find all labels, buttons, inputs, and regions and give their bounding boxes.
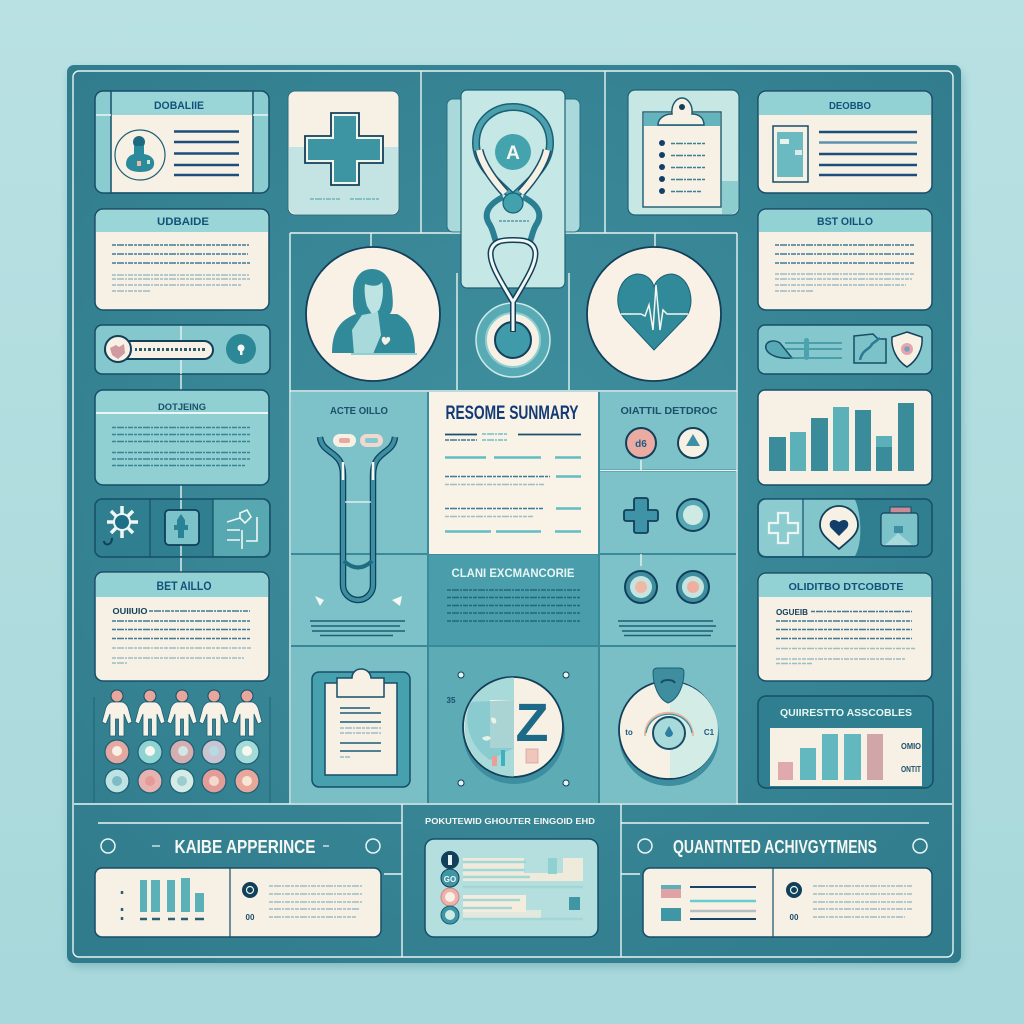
icon: teal square [165, 510, 199, 545]
heading: BET AILLO [156, 581, 212, 593]
lines [690, 887, 756, 919]
icon: clipboard [312, 669, 410, 787]
panel: right skills text card [758, 209, 932, 310]
heading: QUANTNTED ACHIVGYTMENS [673, 837, 877, 857]
icons: rings [101, 839, 380, 853]
icon: key circle [226, 334, 256, 364]
icon: shield [892, 332, 922, 367]
lines [819, 132, 917, 175]
title: RESOME SUNMARY [446, 403, 579, 424]
body text: OGUEIB [776, 608, 808, 617]
card: 00 [246, 913, 255, 922]
icon: stethoscope [476, 107, 550, 332]
body text [112, 245, 250, 263]
panel: bottom centre Z cell [429, 647, 598, 803]
lines [310, 621, 405, 636]
panel: right bar chart card [758, 390, 932, 485]
panel: digital records cells [600, 392, 737, 645]
heading: UDBAIDE [157, 216, 209, 228]
heading: OIATTIL DETDROC [620, 406, 718, 417]
sparkles [315, 596, 402, 606]
icon: dial: to [625, 728, 633, 737]
icon: stethoscope chest piece [476, 302, 550, 377]
icon: Z disc: Z [516, 693, 548, 753]
icon: sketch diagram [227, 510, 257, 549]
text lines [174, 132, 239, 175]
caption [310, 198, 379, 200]
panel: right description card [758, 573, 932, 681]
icon: drop badge [678, 428, 708, 458]
icon: outlined cross [769, 513, 798, 543]
icon: profile avatar [115, 130, 165, 180]
icon: cross [305, 113, 383, 185]
icons: badge rows [105, 740, 259, 793]
icon: stethoscope tube [320, 437, 395, 600]
panel: left key skills card [95, 572, 269, 681]
lines [618, 621, 716, 636]
pills [333, 434, 383, 447]
small label: 35 [447, 696, 456, 705]
dots [458, 672, 569, 786]
people and badges [94, 690, 270, 803]
panel: left icon strip [95, 499, 270, 557]
icon: circle [786, 882, 802, 898]
swatches [661, 885, 681, 921]
icon: pink badge [626, 428, 656, 458]
icon: pink badge: d6 [635, 439, 647, 450]
icon: ring badge [677, 499, 709, 531]
checklist [659, 140, 665, 194]
icons: list markers: GO [444, 875, 456, 884]
icon: dial [619, 668, 718, 779]
panel: bottom left clipboard cell [291, 647, 427, 803]
panel: left column top profile card [95, 91, 269, 193]
panel: right achievements chart card: ONTIT [901, 764, 922, 774]
body text [447, 590, 580, 621]
heading: DOTJEING [158, 402, 206, 413]
card: 00 [790, 913, 799, 922]
heading: DOBALIIE [154, 100, 204, 112]
icon: gear [104, 506, 138, 544]
heading: POKUTEWID GHOUTER EINGOID EHD [425, 816, 595, 826]
panel: right icon card [758, 325, 932, 374]
summary lines [445, 434, 581, 532]
panel: medical cross card [288, 91, 399, 215]
icon: letter badge [495, 134, 531, 170]
labels: OMIO [901, 741, 921, 751]
panel: clinical experience [429, 555, 598, 645]
main panel [67, 65, 962, 966]
panel: left progress card [95, 325, 270, 374]
icon: letter badge: A [506, 143, 520, 164]
icon: document [773, 126, 808, 182]
panel: left text card [95, 209, 269, 310]
panel: right achievements chart card [758, 696, 933, 788]
heading: KAIBE APPERINCE [174, 837, 316, 857]
icons: people row [102, 690, 262, 736]
bar chart [769, 403, 914, 471]
panel: clipboard card [628, 90, 739, 215]
heading: BST OILLO [817, 216, 873, 228]
heading: CLANI EXCMANCORIE [452, 568, 575, 580]
icons: list markers [441, 851, 459, 924]
heading: OLIDITBO DTCOBDTE [788, 581, 904, 593]
panel: bottom achievements [638, 837, 932, 937]
icon: clip [658, 98, 704, 125]
panel: core skills cell [291, 392, 427, 645]
panel: right icon strip [758, 499, 932, 557]
icon: folder [881, 507, 918, 546]
panel: right document card [758, 91, 932, 193]
panel: bottom right dial cell [600, 647, 736, 803]
panel: stethoscope card [447, 90, 580, 332]
panel: resume summary [429, 392, 598, 554]
icon: circle [242, 882, 258, 898]
icon: rounded cross [624, 498, 658, 533]
icon: heart pin [820, 506, 858, 549]
card [643, 868, 932, 937]
icon: tool [766, 338, 842, 360]
progress pill [105, 336, 213, 362]
body text [112, 428, 250, 466]
panel: bottom experience [95, 837, 381, 937]
icon: dial: C1 [704, 728, 715, 737]
bar chart [778, 734, 883, 780]
heading: DEOBBO [829, 100, 871, 112]
panel: bottom centre list [425, 816, 598, 937]
icon: doctor portrait [306, 247, 440, 381]
panel: left light text card [95, 390, 269, 485]
icons: rings [638, 839, 927, 853]
bar chart [140, 878, 204, 912]
icon: swirl badges [625, 571, 709, 603]
icon: heart with pulse [587, 247, 721, 381]
heading: ACTE OILLO [330, 406, 388, 417]
body text: OUIIUIO [112, 606, 148, 616]
icon: map square [854, 334, 886, 363]
body text [775, 245, 914, 263]
icon: Z disc [463, 677, 563, 777]
card [95, 868, 381, 937]
heading: QUIIRESTTO ASSCOBLES [780, 708, 912, 719]
